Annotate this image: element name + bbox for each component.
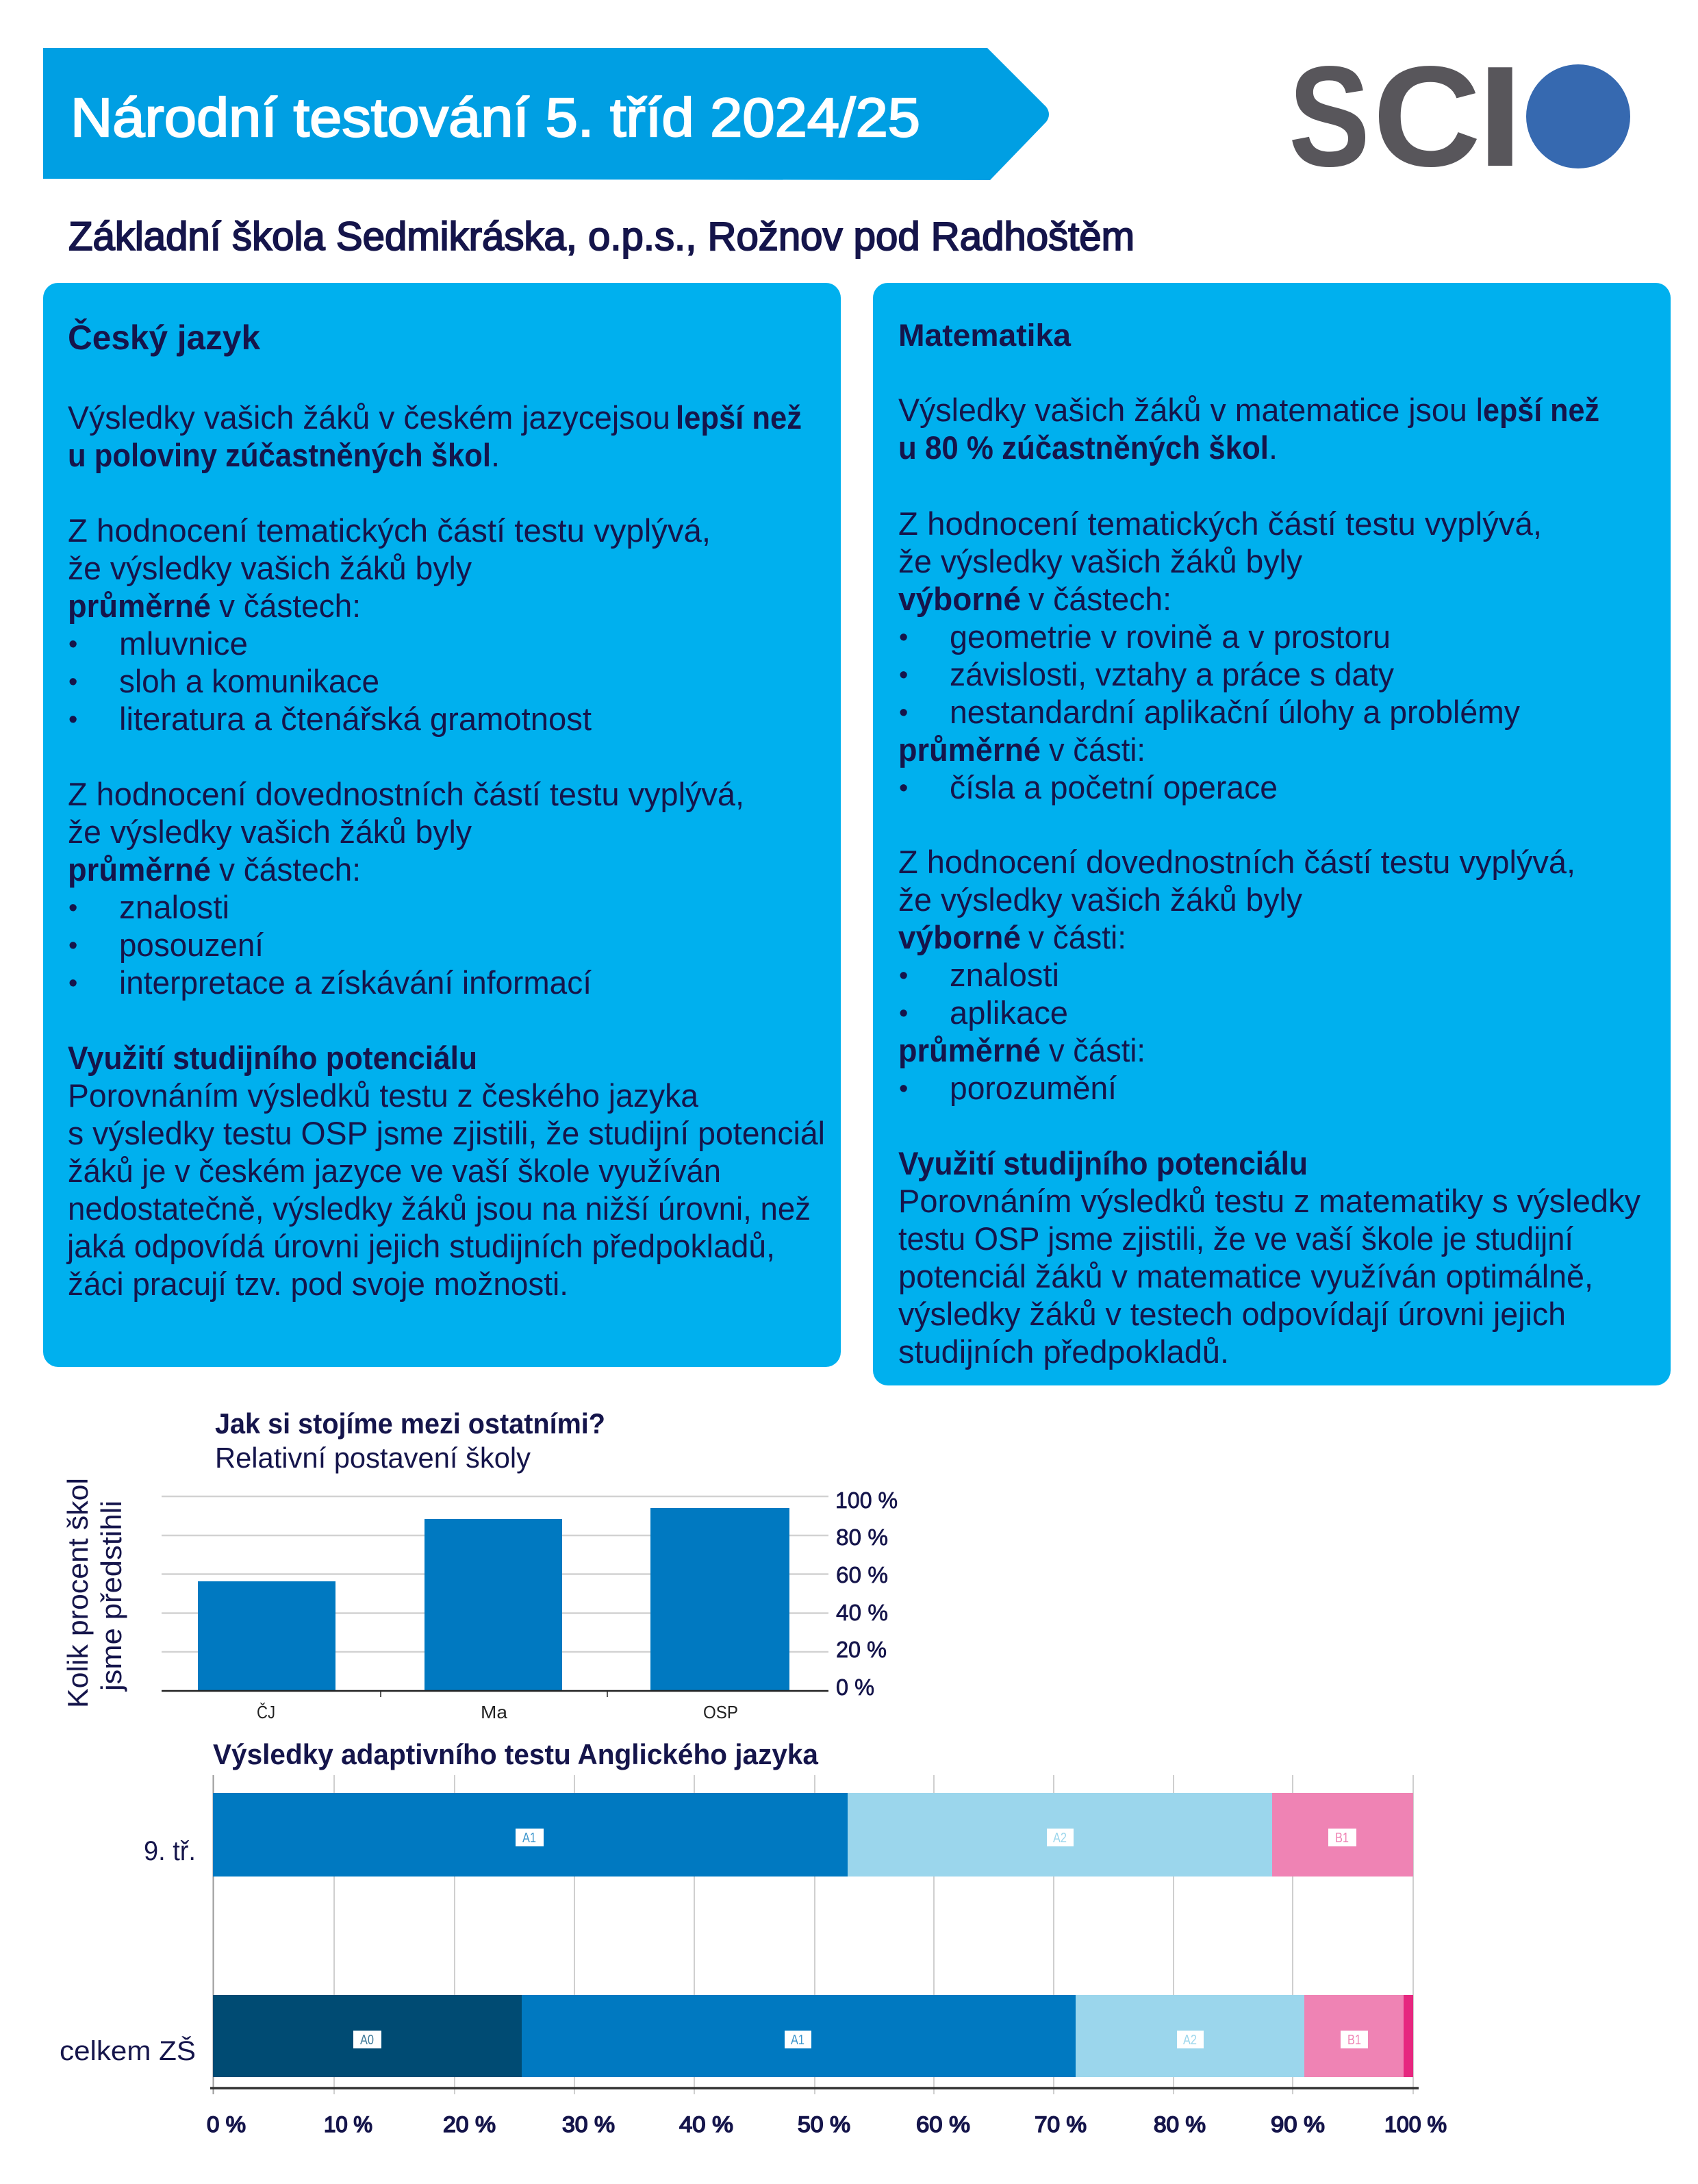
skill parts: • [899, 1075, 908, 1103]
skill parts: porozumění [950, 1070, 1117, 1106]
thematic parts: • [899, 661, 908, 690]
thematic parts: • [899, 699, 908, 727]
stacked bar: 9. tř.: B1 [1335, 1831, 1349, 1846]
row labels: 9. tř. [144, 1836, 196, 1866]
study potential: Využití studijního potenciálu [898, 1145, 1308, 1181]
category labels: ČJ [257, 1702, 275, 1722]
chart heading: jak si stojíme: Jak si stojíme mezi ostatními? [215, 1407, 605, 1440]
skill parts: • [68, 969, 77, 998]
study potential: s výsledky testu OSP jsme zjistili, že studijní potenciál [68, 1115, 825, 1151]
summary paragraph: Výsledky vašich žáků v českém jazycejsou [68, 399, 670, 436]
thematic parts: průměrné [68, 588, 211, 624]
thematic parts: v částech: [1028, 581, 1171, 617]
study potential: testu OSP jsme zjistili, že ve vaší škole je studijní [898, 1220, 1573, 1257]
category labels: OSP [703, 1702, 738, 1722]
stacked bar: celkem ZŠ: A0 [360, 2033, 374, 2048]
thematic parts [898, 505, 1542, 805]
skill parts: interpretace a získávání informací [119, 964, 592, 1001]
thematic parts: • [68, 705, 77, 734]
bar: Ma [424, 1519, 562, 1691]
skill parts [68, 776, 744, 1001]
heading: matematika: Matematika [898, 318, 1072, 353]
skill parts: výborné [898, 919, 1021, 955]
x axis labels: 90 % [1271, 2112, 1325, 2137]
logo: SCIO [1289, 37, 1630, 197]
category labels [257, 1702, 738, 1722]
panel: matematika [873, 283, 1671, 1385]
skill parts: v části: [1028, 919, 1126, 955]
bar: OSP [650, 1508, 789, 1691]
y axis labels: 40 % [836, 1600, 888, 1625]
study potential: Využití studijního potenciálu [68, 1040, 477, 1076]
thematic parts: • [899, 774, 908, 803]
study potential [898, 1145, 1640, 1370]
thematic parts: v částech: [219, 588, 361, 624]
x axis labels: 70 % [1035, 2112, 1087, 2137]
x axis labels: 40 % [679, 2112, 733, 2137]
logo: SCIO: I [1477, 37, 1523, 197]
skill parts [898, 844, 1575, 1106]
skill parts: Z hodnocení dovednostních částí testu vyplývá, [898, 844, 1575, 880]
x axis labels: 60 % [916, 2112, 970, 2137]
skill parts: v částech: [219, 851, 361, 888]
thematic parts: sloh a komunikace [119, 663, 379, 699]
summary paragraph: Výsledky vašich žáků v matematice jsou l [898, 392, 1483, 428]
thematic parts [68, 512, 711, 737]
thematic parts: • [899, 623, 908, 652]
skill parts: Z hodnocení dovednostních částí testu vyplývá, [68, 776, 744, 812]
thematic parts: • [68, 668, 77, 696]
y axis labels: 20 % [836, 1637, 887, 1662]
study potential: jaká odpovídá úrovni jejich studijních předpokladů, [66, 1228, 775, 1264]
thematic parts: literatura a čtenářská gramotnost [119, 701, 592, 737]
bar chart: relative position [62, 1478, 898, 1722]
skill parts: že výsledky vašich žáků byly [68, 814, 472, 850]
study potential: žáků je v českém jazyce ve vaší škole využíván [68, 1153, 721, 1189]
skill parts: • [68, 931, 77, 960]
summary paragraph [68, 399, 802, 473]
stacked bar: celkem ZŠ: B1 [1347, 2033, 1361, 2048]
thematic parts: Z hodnocení tematických částí testu vyplývá, [898, 505, 1542, 542]
title banner: Národní testování 5. tříd 2024/25 [71, 87, 920, 148]
study potential: Porovnáním výsledků testu z matematiky s výsledky [898, 1183, 1640, 1219]
skill parts: aplikace [950, 994, 1068, 1031]
summary paragraph: epší než [1483, 392, 1599, 428]
summary paragraph [898, 392, 1599, 466]
panel: český jazyk [43, 283, 841, 1367]
y axis labels [835, 1488, 898, 1700]
logo: SCIO: S [1289, 37, 1370, 197]
logo: SCIO: C [1373, 37, 1481, 197]
y axis labels: 0 % [836, 1674, 874, 1700]
thematic parts: závislosti, vztahy a práce s daty [950, 656, 1394, 692]
rotated axis title: jsme předstihli [95, 1501, 127, 1692]
category labels: Ma [481, 1702, 508, 1722]
thematic parts: mluvnice [119, 625, 248, 662]
bar: ČJ [198, 1581, 335, 1691]
stacked bar chart: english levels [60, 1775, 1447, 2137]
summary paragraph: lepší než [676, 399, 802, 436]
thematic parts: že výsledky vašich žáků byly [898, 543, 1302, 579]
skill parts: znalosti [950, 957, 1059, 993]
thematic parts: nestandardní aplikační úlohy a problémy [950, 694, 1520, 730]
y axis labels: 60 % [836, 1562, 888, 1587]
rotated axis title [62, 1478, 127, 1708]
skill parts: posouzení [119, 927, 264, 963]
y axis labels: 80 % [836, 1524, 888, 1550]
stacked bar: 9. tř.: A1 [522, 1831, 536, 1846]
skill parts: znalosti [119, 889, 229, 925]
skill parts: • [899, 962, 908, 990]
y axis labels: 100 % [835, 1488, 898, 1513]
stacked bar: celkem ZŠ: A1 [791, 2033, 804, 2048]
row labels [60, 1836, 196, 2066]
x axis labels: 10 % [324, 2112, 372, 2137]
thematic parts: že výsledky vašich žáků byly [68, 550, 472, 586]
study potential: Porovnáním výsledků testu z českého jazyka [68, 1077, 699, 1114]
skill parts: • [68, 894, 77, 922]
title banner [43, 48, 1049, 180]
heading: český jazyk: Český jazyk [68, 318, 260, 357]
skill parts: průměrné [898, 1032, 1041, 1068]
summary paragraph: . [1269, 429, 1278, 466]
stacked bar: celkem ZŠ: A2 [1183, 2033, 1197, 2048]
stacked bar: celkem ZŠ [213, 1995, 1413, 2077]
chart heading: anglický jazyk: Výsledky adaptivního testu Anglického jazyka [213, 1738, 819, 1770]
chart heading: jak si stojíme: Relativní postavení školy [215, 1442, 531, 1474]
summary paragraph: . [491, 437, 500, 473]
thematic parts: výborné [898, 581, 1021, 617]
skill parts: v části: [1049, 1032, 1145, 1068]
thematic parts: průměrné [898, 731, 1041, 768]
stacked bar: 9. tř.: A2 [1053, 1831, 1067, 1846]
skill parts: že výsledky vašich žáků byly [898, 881, 1302, 918]
summary paragraph: u poloviny zúčastněných škol [68, 437, 491, 473]
x axis labels: 80 % [1154, 2112, 1206, 2137]
stacked bar: 9. tř. [213, 1793, 1413, 1877]
thematic parts: geometrie v rovině a v prostoru [950, 618, 1391, 655]
study potential: žáci pracují tzv. pod svoje možnosti. [68, 1266, 568, 1302]
skill parts: průměrné [68, 851, 211, 888]
row labels: celkem ZŠ [60, 2035, 196, 2066]
thematic parts: Z hodnocení tematických částí testu vyplývá, [68, 512, 711, 549]
study potential [66, 1040, 825, 1302]
thematic parts: • [68, 630, 77, 659]
x axis labels: 30 % [562, 2112, 615, 2137]
study potential: potenciál žáků v matematice využíván optimálně, [898, 1258, 1593, 1294]
chart heading: jak si stojíme [215, 1407, 605, 1474]
study potential: studijních předpokladů. [898, 1333, 1229, 1370]
summary paragraph: u 80 % zúčastněných škol [898, 429, 1269, 466]
skill parts: • [899, 999, 908, 1028]
rotated axis title: Kolik procent škol [62, 1478, 94, 1708]
thematic parts: čísla a početní operace [950, 769, 1278, 805]
x axis labels: 20 % [443, 2112, 496, 2137]
study potential: výsledky žáků v testech odpovídají úrovni jejich [898, 1296, 1566, 1332]
study potential: nedostatečně, výsledky žáků jsou na nižší úrovni, než [68, 1190, 811, 1227]
x axis labels: 0 % [207, 2112, 246, 2137]
school name: Základní škola Sedmikráska, o.p.s., Rožnov pod Radhoštěm [68, 214, 1135, 259]
thematic parts: v části: [1049, 731, 1145, 768]
x axis labels: 100 % [1384, 2112, 1447, 2137]
x axis labels [207, 2112, 1447, 2137]
x axis labels: 50 % [798, 2112, 850, 2137]
